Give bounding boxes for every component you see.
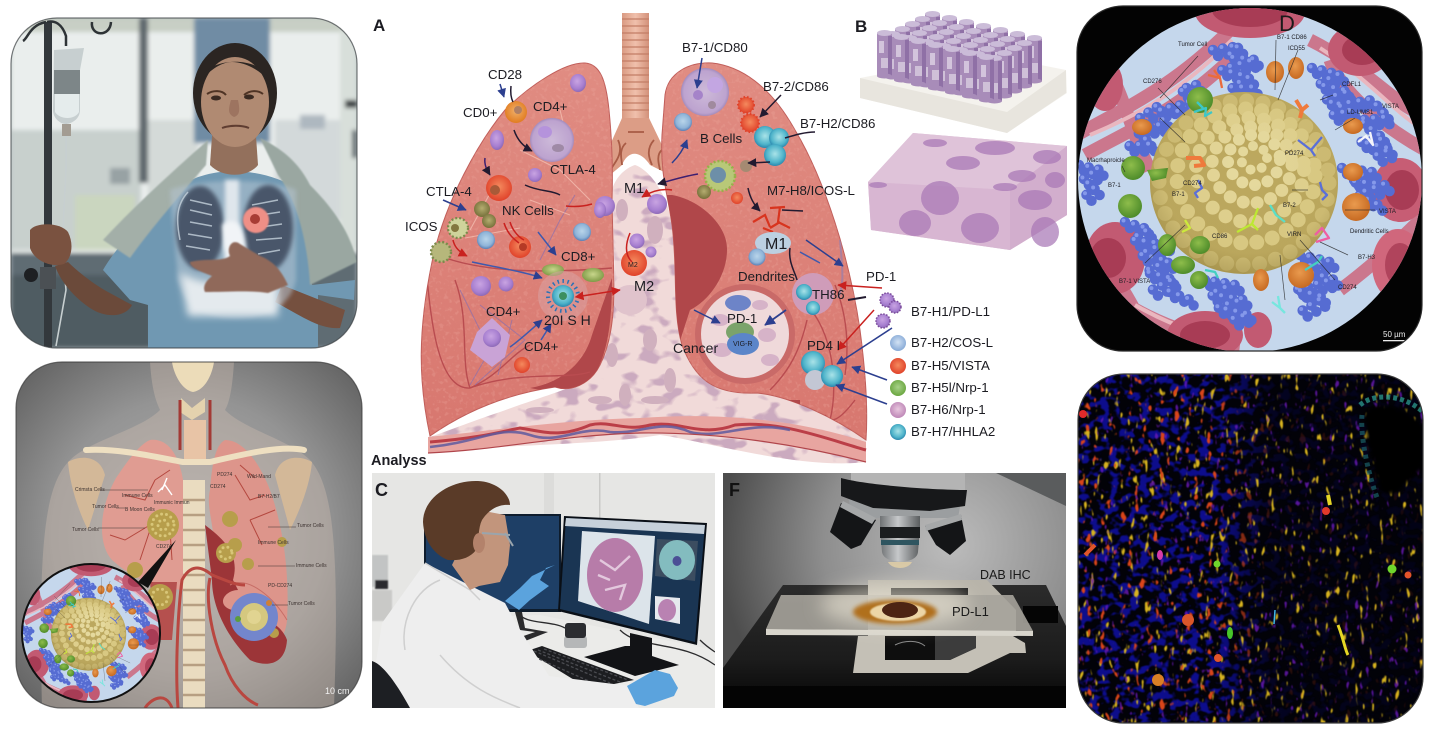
lung labels: ICOS	[405, 219, 438, 234]
panel letter A: A	[373, 16, 385, 35]
bright markers	[1079, 410, 1412, 686]
chest hand	[190, 242, 288, 293]
dark duct	[1365, 406, 1423, 495]
violet signal	[1078, 374, 1423, 723]
glass slide	[766, 583, 1033, 636]
panel E: multiplex immunofluorescence	[1078, 374, 1423, 723]
tumour labels: CDFL1	[1342, 82, 1362, 88]
tumour labels: B7-H3	[1358, 255, 1376, 261]
tumour labels: B7-1 CD86	[1277, 35, 1307, 41]
legend: B7 family: B7-H1/PD-L1	[911, 304, 990, 319]
body labels: CD274	[210, 484, 226, 490]
head	[193, 43, 277, 175]
body labels: Immune Cells	[122, 493, 153, 499]
x-ray chest	[170, 180, 296, 318]
cancer nodule	[695, 284, 795, 384]
monitor stand	[584, 633, 679, 676]
background: hospital window	[11, 18, 357, 348]
white tray	[860, 54, 1067, 133]
tissue core array	[877, 11, 1042, 104]
panel D: tumour microenvironment	[1070, 0, 1430, 360]
legend: B7 family: B7-H5/VISTA	[911, 358, 990, 373]
lung cut open	[205, 525, 287, 664]
lung labels: CD28	[488, 67, 522, 82]
lung labels: CD4+	[524, 339, 559, 354]
body labels: Wild-Mand	[247, 474, 271, 480]
lung labels: M1	[765, 236, 787, 253]
lung labels: CD4+	[486, 304, 521, 319]
lung labels: VIG-R	[733, 341, 752, 348]
body labels: Tumor Cells	[92, 504, 119, 510]
lung labels: CD8+	[561, 249, 596, 264]
bronchial branches	[110, 465, 275, 560]
tumour labels: B7-1	[1172, 192, 1185, 198]
keyboard	[532, 646, 634, 684]
panel letter F: F	[729, 480, 740, 500]
legend: B7 family: B7-H7/HHLA2	[911, 424, 995, 439]
legend: B7 family	[890, 304, 995, 440]
tumour labels: B7-2	[1283, 203, 1296, 209]
panel C: researcher at workstation	[372, 473, 715, 708]
tumour labels	[1087, 35, 1399, 291]
panel F: microscope and slide	[723, 473, 1066, 708]
legend: B7 family: B7-H6/Nrp-1	[911, 402, 986, 417]
glove on mouse	[627, 670, 678, 706]
arm and IV hand	[55, 262, 132, 315]
panel: patient with chest x-ray	[11, 18, 357, 348]
cables	[517, 612, 715, 665]
tumors on lungs	[127, 509, 287, 638]
body labels: B Moon Cells	[125, 507, 155, 513]
lung labels: B7-2/CD86	[763, 79, 829, 94]
mediastinum	[428, 165, 866, 463]
pleural base band	[428, 416, 866, 462]
lung labels: CD4+	[533, 99, 568, 114]
trachea	[610, 13, 664, 175]
tumour labels: Tumor Cell	[1178, 42, 1207, 48]
tumour labels: Dendritic Cells	[1350, 229, 1389, 235]
lung labels: Dendrites	[738, 269, 795, 284]
lung labels: PD-1	[866, 269, 896, 284]
inset pointer	[138, 540, 176, 588]
left monitor	[424, 514, 561, 645]
tumour labels: ICD55	[1288, 46, 1306, 52]
heading: analysis: Analyss	[371, 453, 427, 469]
tissue block	[868, 133, 1067, 250]
yellow signal	[1078, 374, 1423, 723]
arrows	[443, 58, 892, 404]
tumour labels: Macrhaproicle	[1087, 158, 1125, 164]
chair	[372, 661, 410, 708]
tumour labels: VIRN	[1287, 232, 1301, 238]
body labels: CD274	[156, 544, 172, 550]
gown	[103, 171, 355, 348]
tumour labels: CD274	[1183, 181, 1202, 187]
body labels: B7-H2/B7	[258, 494, 280, 500]
body labels: Immune Cells	[258, 540, 289, 546]
translucent body silhouette	[41, 362, 336, 708]
researcher head	[423, 481, 513, 590]
clavicles	[86, 449, 304, 462]
inset: tumour microenvironment	[19, 555, 163, 705]
body labels	[72, 472, 327, 607]
raised glove	[505, 565, 555, 610]
skull and neck	[172, 362, 214, 462]
lung tumour mass	[230, 593, 278, 641]
lung labels: B7-H2/CD86	[800, 116, 875, 131]
panel letter C: C	[375, 480, 388, 500]
scale bar: 10 cm	[325, 686, 350, 696]
lung labels: Cancer	[673, 340, 718, 356]
right monitor	[558, 516, 707, 645]
tumour labels: B7-1 VISTA	[1119, 279, 1150, 285]
lung labels: CTLA-4	[550, 162, 596, 177]
lung labels: TH86	[812, 287, 845, 302]
lung labels: PD4 I	[807, 338, 840, 353]
body labels: PD-CD274	[268, 583, 292, 589]
panel: body anatomy with lungs and inset	[16, 362, 362, 708]
left lung	[415, 60, 620, 440]
tumour labels: B7-1	[1108, 183, 1121, 189]
body labels: Immunic Immun	[154, 500, 190, 506]
lung labels	[405, 40, 896, 356]
mediastinal M2 cells: M2	[628, 262, 638, 269]
microscope stage	[723, 580, 1066, 708]
lung labels: B7-1/CD80	[682, 40, 748, 55]
shelf device	[372, 555, 392, 621]
lung labels: M7-H8/ICOS-L	[767, 183, 855, 198]
body labels: Tumor Cells	[72, 527, 99, 533]
spine	[183, 480, 205, 708]
tumour labels: VISTA	[1382, 104, 1399, 110]
tumour labels: CD86	[1212, 234, 1228, 240]
lung labels: NK Cells	[502, 203, 554, 218]
scale bar: 50 µm	[1383, 330, 1406, 339]
tumour labels: VISTA	[1379, 209, 1396, 215]
legend: B7 family: B7-H2/COS-L	[911, 335, 993, 350]
body labels: Tumor Cells	[297, 523, 324, 529]
panel B: tissue microarray and block	[855, 11, 1067, 250]
IV pole	[23, 22, 111, 348]
lung left	[102, 440, 186, 590]
mediastinal M2 cells	[621, 194, 667, 276]
lung labels: PD-1	[727, 311, 757, 326]
lung labels: 20I S H	[544, 312, 591, 328]
right lung	[660, 60, 901, 445]
lung labels: B Cells	[700, 131, 742, 146]
tumour labels: CD274	[1338, 285, 1357, 291]
nuclei stain	[1078, 374, 1423, 723]
body labels: PD274	[217, 472, 233, 478]
researcher lab coat	[383, 563, 614, 689]
body labels: Crimsta Cells	[75, 487, 105, 493]
lung labels: CD0+	[463, 105, 498, 120]
tumour labels: PD274	[1285, 151, 1304, 157]
lung labels: M1	[624, 181, 644, 197]
towel	[103, 138, 357, 285]
panel A: lung diagram	[373, 13, 995, 465]
scapulae	[68, 458, 312, 530]
lung right	[209, 440, 288, 651]
label PD-L1: PD-L1	[952, 604, 989, 619]
label DAB IHC: DAB IHC	[980, 568, 1031, 582]
lung labels: M2	[634, 279, 654, 295]
body labels: Immune Cells	[296, 563, 327, 569]
tumour labels: LD-UMS1	[1347, 110, 1374, 116]
body labels: Tumor Cells	[288, 601, 315, 607]
legend: B7 family: B7-H5l/Nrp-1	[911, 380, 989, 395]
sample cup	[564, 623, 587, 648]
lung labels: CTLA-4	[426, 184, 472, 199]
left lung cells	[431, 74, 615, 373]
arteries	[145, 568, 258, 708]
panel letter B: B	[855, 17, 867, 36]
orange signal	[1078, 374, 1423, 723]
objective turret	[830, 473, 967, 568]
panel letter D: D	[1279, 11, 1295, 36]
right lung cells	[674, 68, 901, 390]
DAB stained tissue	[853, 600, 937, 624]
tumour labels: CD276	[1143, 79, 1162, 85]
